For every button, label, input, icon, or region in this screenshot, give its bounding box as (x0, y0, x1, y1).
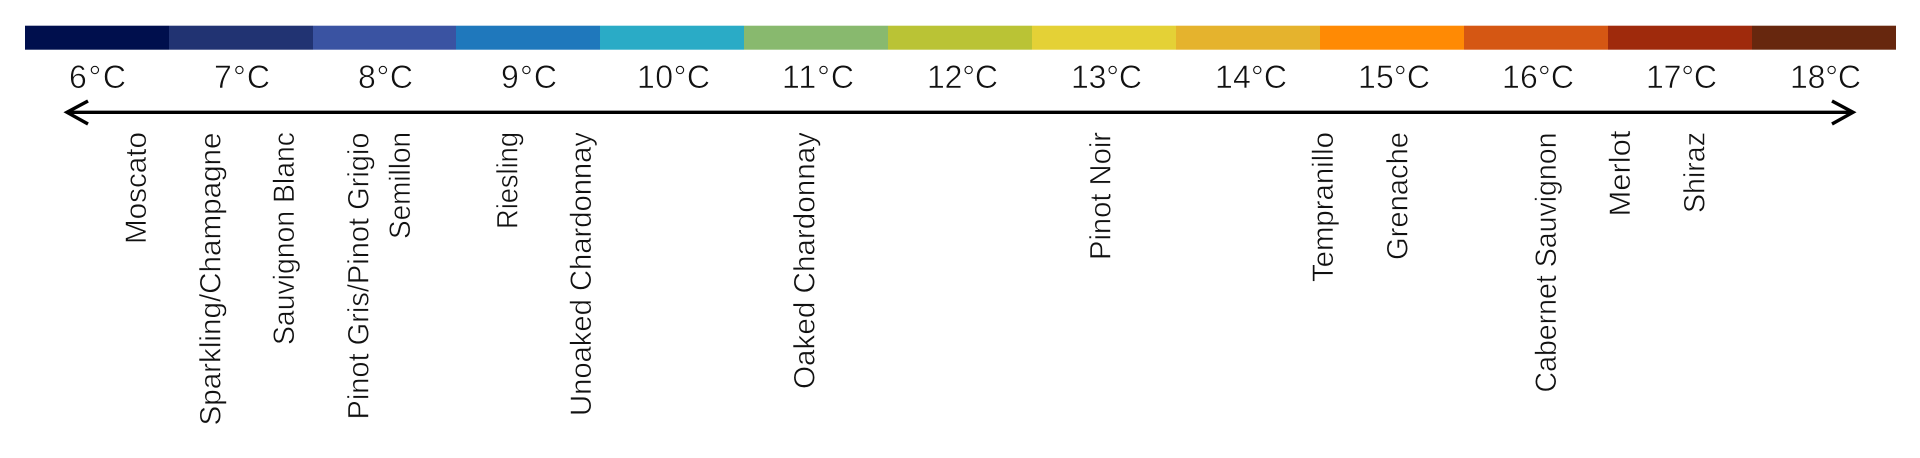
wine variety labels: Merlot (1604, 130, 1637, 216)
temperature labels: 11°C (782, 59, 854, 95)
wine variety labels: Shiraz (1678, 132, 1712, 213)
temperature labels: 15°C (1358, 59, 1430, 95)
temperature labels: 16°C (1502, 59, 1574, 95)
wine variety labels: Sauvignon Blanc (268, 132, 301, 345)
wine variety labels: Riesling (492, 132, 524, 229)
temperature labels: 10°C (637, 59, 710, 95)
wine variety labels: Sparkling/Champagne (194, 132, 228, 426)
temperature labels: 17°C (1646, 59, 1717, 95)
wine variety labels: Unoaked Chardonnay (565, 132, 598, 416)
wine variety labels: Cabernet Sauvignon (1530, 132, 1563, 392)
temperature labels: 7°C (214, 59, 270, 95)
wine variety labels: Pinot Noir (1084, 132, 1118, 260)
temperature labels: 8°C (358, 59, 413, 95)
temperature labels: 14°C (1215, 59, 1287, 95)
temperature labels: 6°C (69, 59, 126, 95)
wine variety labels: Pinot Gris/Pinot Grigio (342, 132, 376, 420)
wine variety labels: Semillon (384, 132, 417, 239)
temperature labels: 9°C (501, 59, 557, 95)
wine variety labels: Oaked Chardonnay (788, 132, 822, 389)
wine variety labels: Moscato (120, 132, 153, 244)
temperature labels: 13°C (1071, 59, 1142, 95)
wine variety labels (120, 130, 1712, 426)
wine variety labels: Grenache (1382, 132, 1414, 260)
double-headed arrow (67, 101, 1853, 124)
temperature labels (69, 59, 1861, 95)
temperature labels: 18°C (1790, 59, 1861, 95)
wine variety labels: Tempranillo (1307, 132, 1340, 282)
temperature labels: 12°C (927, 59, 998, 95)
colour scale bar (25, 26, 1896, 50)
